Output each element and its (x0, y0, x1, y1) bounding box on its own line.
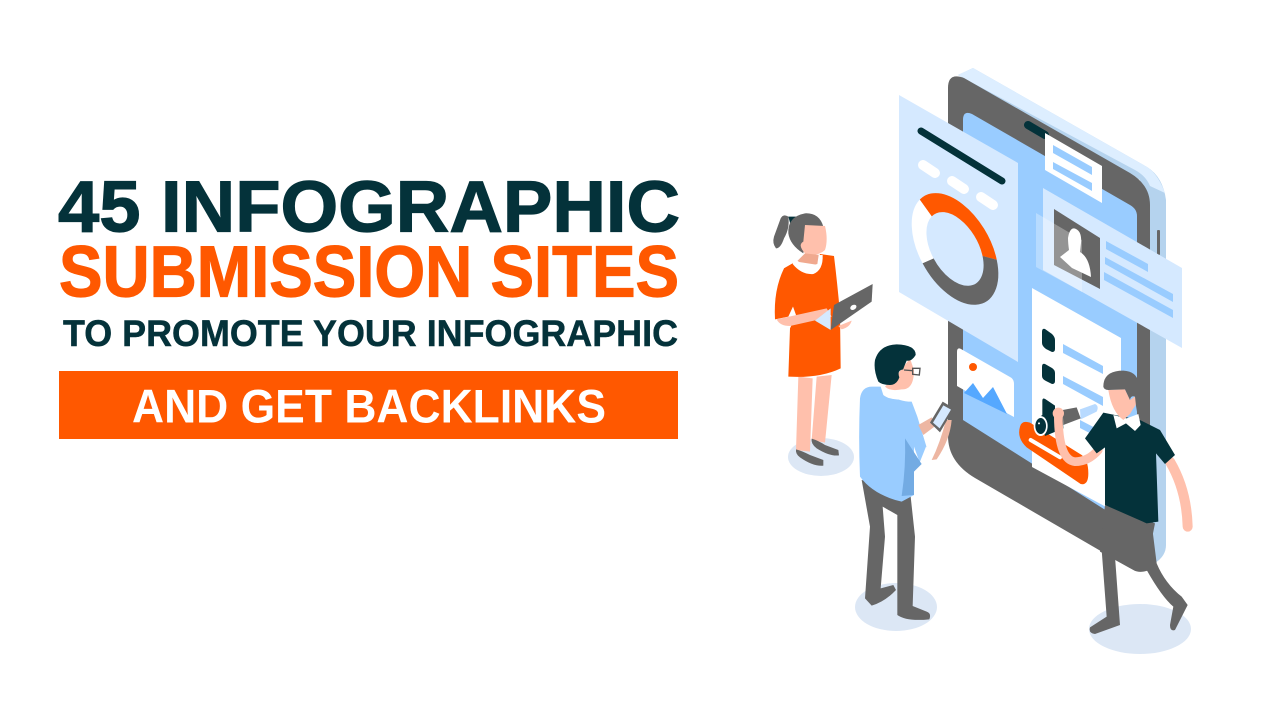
small text card (1045, 133, 1102, 203)
title block (58, 168, 680, 439)
rear arm (1170, 462, 1188, 527)
legs (1090, 520, 1188, 634)
ground shadows (788, 438, 1191, 654)
banner: and get backlinks: AND GET BACKLINKS (132, 380, 606, 432)
donut chart (919, 187, 991, 311)
content panel with list rows (1032, 288, 1121, 515)
phone body (948, 68, 1166, 570)
heading line: 45 Infographic: 45 INFOGRAPHIC (58, 168, 680, 248)
banner: and get backlinks (59, 371, 678, 439)
subheading: to promote your infographic: TO PROMOTE YOUR INFOGRAPHIC (63, 313, 678, 354)
profile card (1036, 188, 1182, 348)
torso and shirt (1085, 413, 1175, 523)
orange button (1019, 422, 1088, 484)
heading line: Submission Sites: SUBMISSION SITES (59, 232, 679, 312)
woman with laptop (773, 213, 873, 466)
man with smartphone (859, 344, 954, 620)
isometric illustration (773, 68, 1191, 654)
dashboard panel with donut chart (899, 95, 1018, 362)
forearm and hand (1058, 415, 1098, 462)
image card (957, 348, 1014, 417)
telescope and camera (1034, 399, 1098, 436)
man with camera (1034, 371, 1188, 634)
